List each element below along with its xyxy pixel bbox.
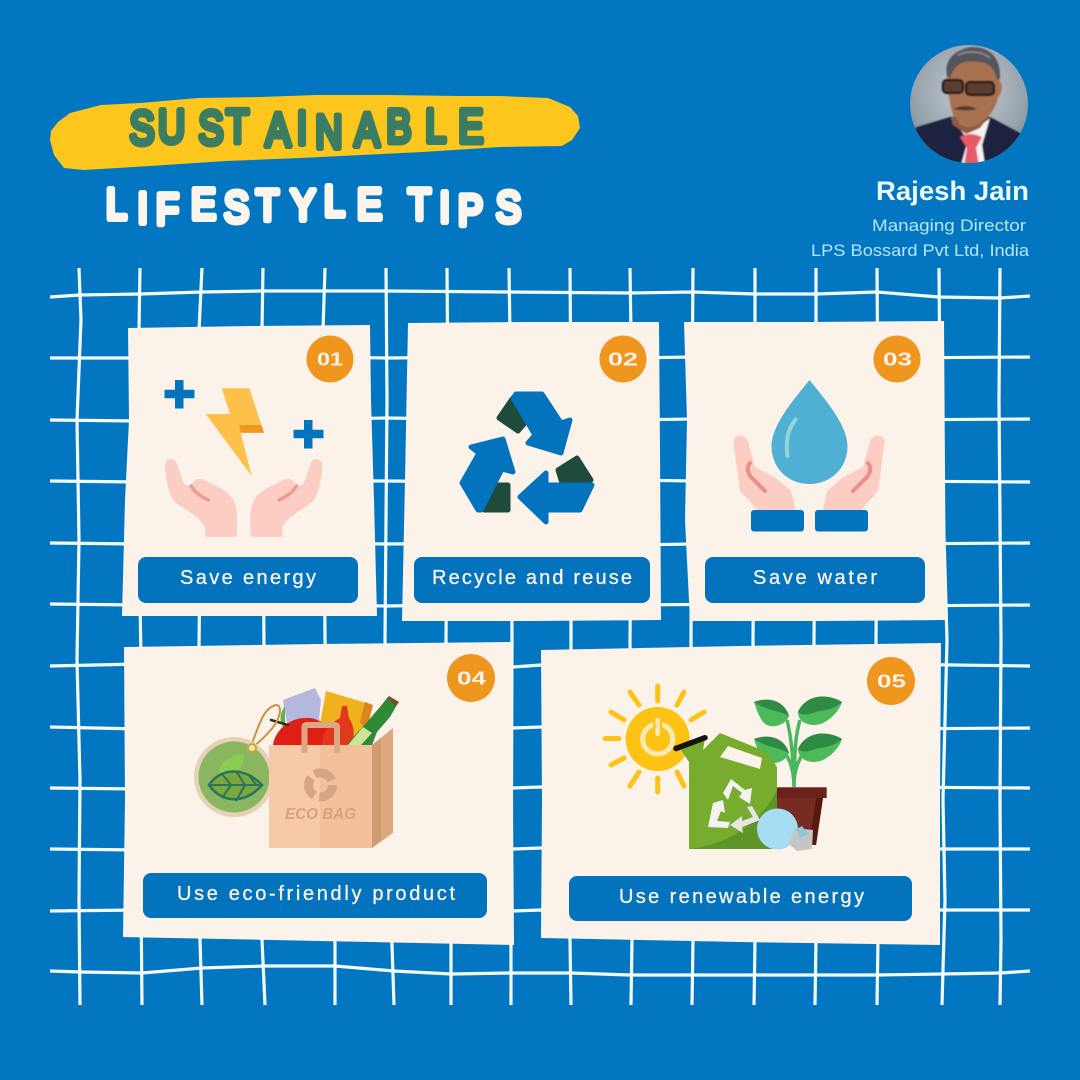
badge 02: 02 bbox=[608, 350, 638, 370]
badge 05: 05 bbox=[877, 672, 906, 692]
badge 04 bbox=[447, 654, 495, 702]
badge 02 bbox=[600, 336, 646, 382]
label: use renewable energy: Use renewable energy bbox=[619, 886, 864, 908]
label: save energy bbox=[138, 557, 358, 603]
panel: recycle and reuse bbox=[402, 322, 661, 621]
panel: save energy bbox=[122, 325, 377, 616]
title bbox=[50, 95, 580, 235]
label: save energy: Save energy bbox=[180, 567, 316, 589]
panel: eco-friendly product bbox=[123, 642, 514, 945]
badge 01: 01 bbox=[317, 350, 343, 370]
icon: eco bag with tag bbox=[194, 688, 399, 848]
panel: save water bbox=[684, 321, 946, 621]
label: recycle and reuse: Recycle and reuse bbox=[432, 567, 632, 589]
badge 04: 04 bbox=[457, 668, 486, 688]
badge 05 bbox=[867, 657, 915, 705]
label: save water bbox=[705, 557, 925, 603]
heading: sustainable: SUSTAINABLE bbox=[130, 100, 483, 159]
label: use eco-friendly product bbox=[143, 873, 487, 918]
author block bbox=[811, 40, 1035, 260]
portrait bbox=[910, 45, 1028, 163]
job title: Managing Director bbox=[872, 216, 1026, 235]
icon: eco bag with tag: ECO BAG bbox=[285, 806, 356, 823]
badge 03: 03 bbox=[883, 350, 912, 370]
name: Rajesh Jain bbox=[876, 176, 1029, 206]
label: use renewable energy bbox=[569, 876, 912, 921]
yellow brush stroke bbox=[50, 95, 580, 170]
label: recycle and reuse bbox=[414, 557, 650, 603]
heading: lifestyle tips: LIFESTYLE TIPS bbox=[106, 176, 521, 235]
icon: water drop in hands bbox=[733, 380, 885, 532]
panel: renewable energy bbox=[541, 643, 941, 945]
icon: recycle arrows bbox=[462, 394, 592, 522]
badge 01 bbox=[306, 336, 354, 382]
label: use eco-friendly product: Use eco-friendly product bbox=[177, 883, 455, 905]
icon: renewable energy bbox=[605, 686, 842, 851]
icon: energy in hands bbox=[164, 380, 324, 537]
label: save water: Save water bbox=[753, 567, 877, 589]
company: LPS Bossard Pvt Ltd, India bbox=[811, 241, 1030, 260]
badge 03 bbox=[874, 336, 920, 382]
